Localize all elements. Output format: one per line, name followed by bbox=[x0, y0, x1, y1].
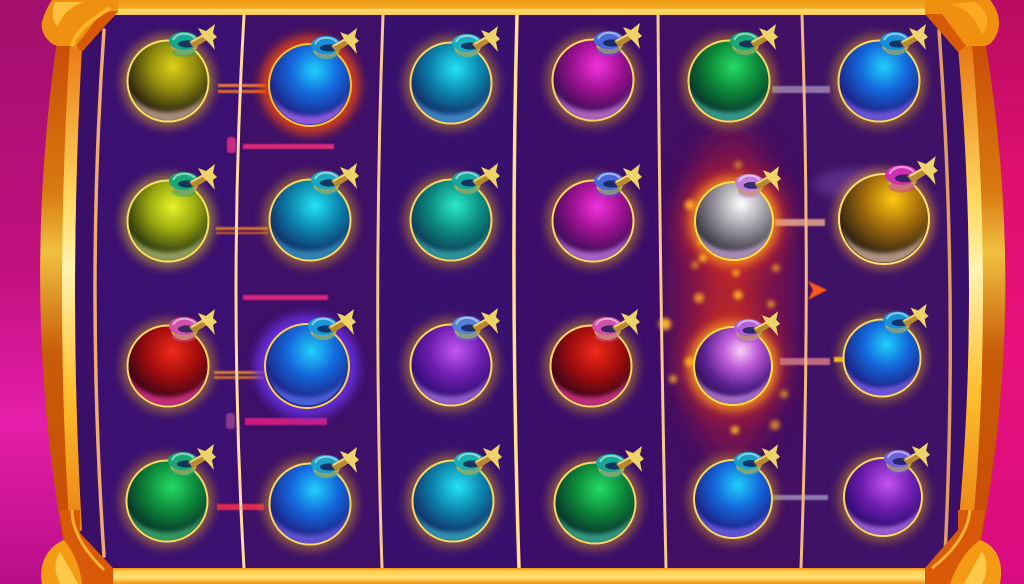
bomb r2c3 teal bbox=[404, 163, 500, 267]
explosion glow reel 5 bbox=[672, 130, 792, 460]
sparks bbox=[659, 161, 788, 434]
bomb r2c2 cyan bbox=[263, 163, 359, 267]
frame: right bar bbox=[958, 40, 1005, 545]
bomb r2c5 silver bbox=[689, 166, 781, 266]
bomb r1c6 blue bbox=[832, 24, 928, 128]
bomb r4c6 purple bbox=[838, 442, 930, 542]
spark: arrow shard bbox=[808, 281, 827, 300]
bomb r4c3 teal bbox=[406, 444, 502, 548]
bomb r2c4 magenta bbox=[546, 164, 642, 268]
bomb r1c4 magenta bbox=[546, 23, 642, 127]
frame: bottom-left corner bbox=[41, 510, 113, 584]
frame: left bar bbox=[40, 40, 82, 545]
frame: left bright strip bbox=[62, 42, 82, 535]
bomb r3c6 blue bbox=[838, 304, 929, 402]
bomb r1c5 green bbox=[682, 24, 778, 128]
bomb r4c2 blue bbox=[263, 447, 359, 551]
bomb r3c3 purple bbox=[404, 308, 500, 412]
bomb r3c1 red bbox=[121, 309, 217, 413]
bomb r1c3 cyan bbox=[404, 26, 500, 130]
bomb r4c4 green bbox=[548, 446, 644, 550]
frame: bottom bar bbox=[90, 568, 940, 584]
bomb r1c1 yellow bbox=[121, 24, 217, 128]
bomb r3c4 red bbox=[544, 309, 640, 413]
bomb r2c6 gold bbox=[814, 156, 938, 269]
reel column shades bbox=[98, 15, 245, 570]
bomb r3c5 violet bbox=[688, 311, 780, 411]
frame: right bright strip bbox=[958, 44, 983, 535]
frame: top bar bbox=[90, 0, 940, 15]
bomb r3c2 blue glowing bbox=[255, 309, 359, 418]
frame: top-left corner bbox=[42, 0, 118, 52]
bomb r4c5 blue bbox=[688, 444, 780, 544]
reel dividers bbox=[95, 15, 950, 568]
frame: bottom-right corner bbox=[925, 510, 1001, 584]
bomb r4c1 green bbox=[120, 444, 216, 548]
connector streaks bbox=[214, 84, 844, 510]
bomb r1c2 blue bbox=[260, 28, 360, 135]
bomb r2c1 lime bbox=[121, 164, 217, 268]
frame: top-right corner bbox=[925, 0, 999, 52]
